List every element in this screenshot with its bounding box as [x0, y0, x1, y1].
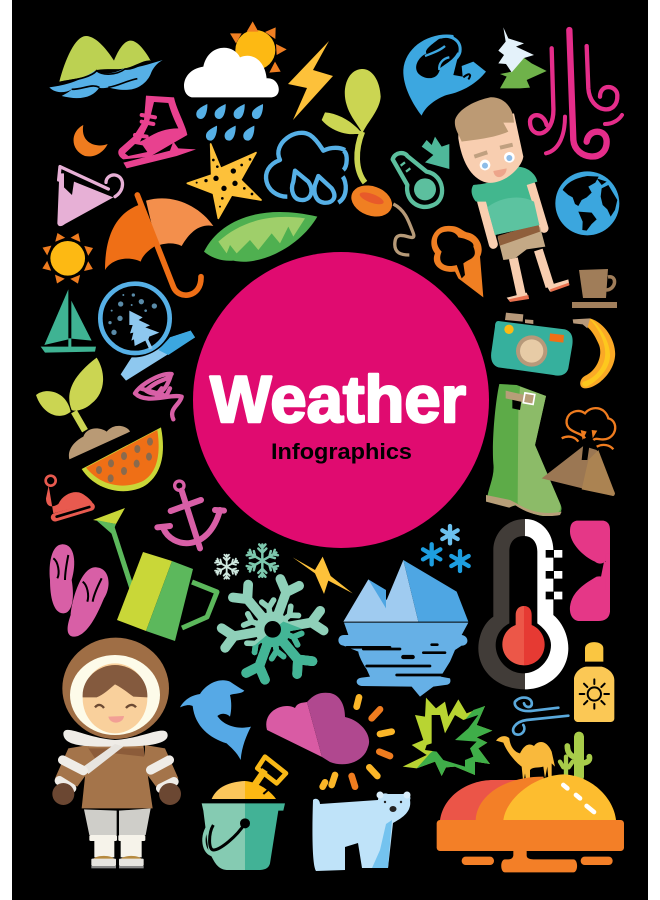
icon: desert dunes, camel and cactus	[437, 736, 624, 872]
title: Weather	[210, 362, 466, 436]
icon: snowy pine tree	[498, 27, 547, 88]
icon: pink wind swirls	[530, 30, 622, 157]
icon: green welly boot	[486, 384, 562, 516]
icon: hills and waves	[49, 36, 163, 98]
icon: iceberg	[338, 560, 468, 697]
icon: starfish	[187, 144, 261, 218]
icon: sprout in soil	[36, 358, 130, 459]
icon: blue wind	[513, 698, 568, 735]
icon: mountain with wind curl	[57, 167, 122, 226]
icon: umbrella	[105, 195, 213, 295]
icon: blue snow crystals	[423, 526, 469, 571]
icon: sunscreen bottle	[574, 642, 614, 722]
icon: maple leaf outline	[403, 698, 492, 776]
icon: snow globe	[100, 284, 195, 381]
icon: red sledge hat	[46, 476, 93, 517]
central pink circle	[193, 252, 489, 548]
icon: green leaf	[204, 212, 317, 262]
icon: sprouting seed	[322, 69, 414, 255]
icon: camera	[491, 313, 573, 376]
icon: outlined cloud with rain drops	[266, 133, 347, 203]
icon: polar bear	[312, 792, 410, 871]
icon: bucket and spade	[202, 757, 286, 870]
illustration: child in parka	[52, 638, 181, 868]
icon: banana	[573, 318, 615, 388]
icon: flip flops	[50, 544, 109, 637]
icon: small snowflakes	[215, 544, 278, 579]
icon: ice cream cone	[431, 226, 483, 297]
icon: sailing boat	[41, 289, 96, 353]
icon: globe	[555, 171, 619, 235]
icon: ocean wave	[403, 35, 486, 116]
icon: sun behind rain cloud	[184, 21, 287, 141]
icon: anchor	[157, 481, 224, 548]
icon: ice skate	[118, 96, 196, 168]
icon: coffee cup and saucer	[572, 269, 617, 308]
icon: black and white thermometer	[478, 519, 568, 689]
icon: small sun	[40, 231, 95, 286]
icon: watermelon slice	[82, 427, 163, 491]
icon: second lightning bolt	[293, 557, 353, 594]
icon: crescent moon	[74, 125, 108, 156]
icon: big two-tone snowflake	[222, 579, 324, 680]
icon: erupting volcano	[542, 408, 615, 496]
icon: green thermometer with down arrow	[393, 137, 449, 207]
subtitle: Infographics	[271, 439, 412, 464]
icon: lightning bolt	[288, 41, 333, 120]
icon: pink cloud	[266, 693, 369, 764]
icon: watering can	[93, 508, 217, 641]
icon: sun rays around cloud	[323, 697, 392, 787]
icon: leaping dolphin	[180, 680, 251, 760]
illustration: boy in green t-shirt	[455, 97, 569, 302]
icon: tornado	[135, 374, 182, 419]
icon: pink sunglasses	[570, 521, 610, 621]
